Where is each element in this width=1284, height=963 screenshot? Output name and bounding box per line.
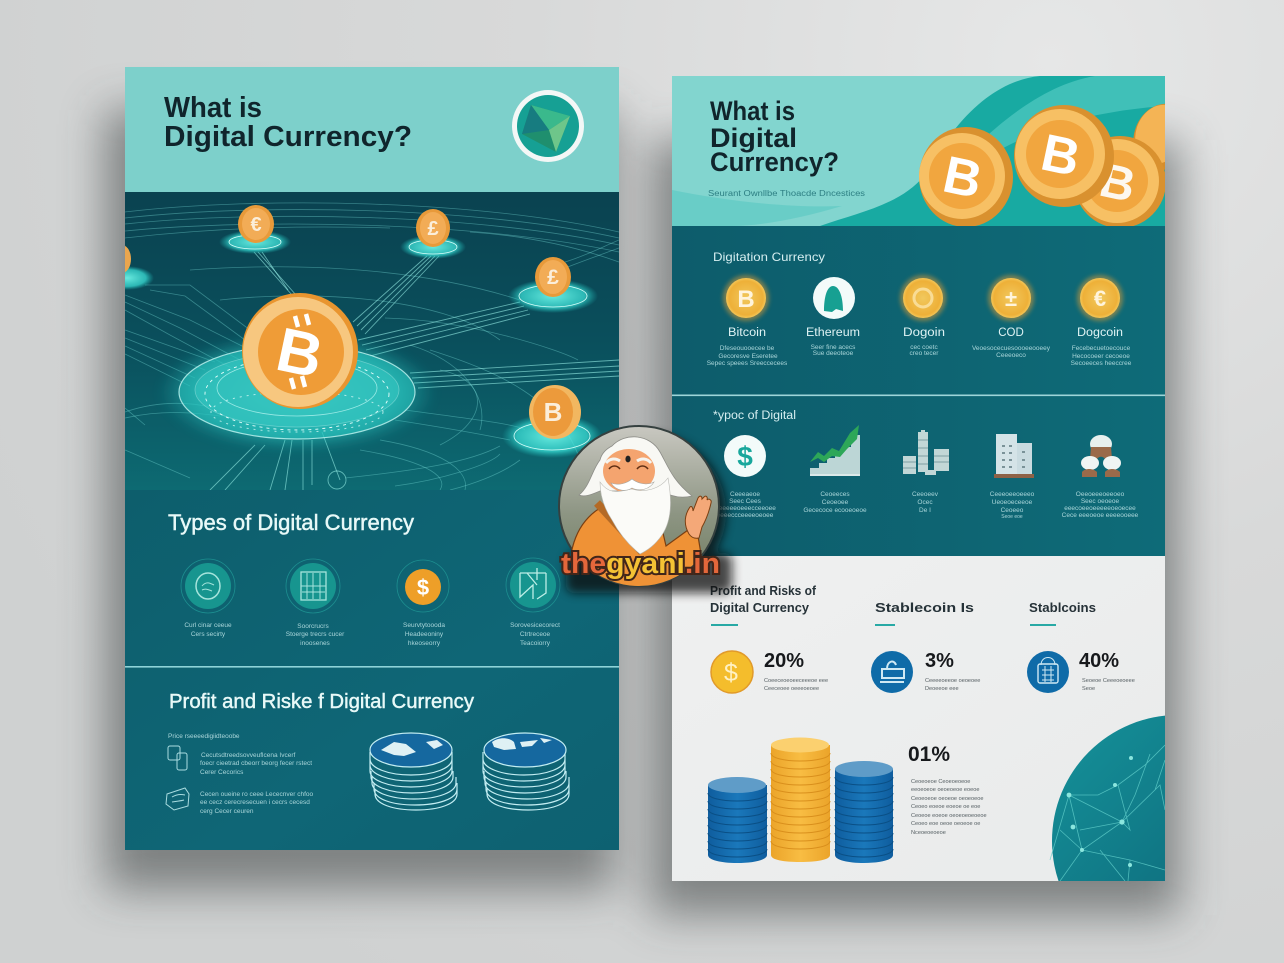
heading: profit and risks: Digital Currency [710,600,810,615]
icon: dogecoin 2: € [1094,286,1106,311]
sash [597,503,642,552]
glow disc: central [164,338,430,450]
icon: small coin 3: £ [547,266,559,289]
stat: 3%: 3% [925,650,954,672]
heading: profit and risks: Profit and Risks of [710,583,817,598]
icon: small coin 4: B [544,397,562,427]
stat: 01%: 01% [908,743,950,766]
labels and descriptions: coins: Gecoresve Eseretee [718,353,778,360]
robe [572,509,702,586]
icon: cropped coin [125,246,131,272]
labels and descriptions: coins: Ceeeoeco [996,352,1026,359]
labels and descriptions: coins: Sepec speees Sreeccecees [707,360,788,367]
stat: 40%: Seoeoe Ceeeoeoeee [1082,678,1135,684]
text list: risks: ee cecz cerecresecuen i cecrs cecesd [200,799,310,806]
text list: risks: foecr cieetrad cbeorr beorg fecer rstect [200,760,312,767]
icon: dollar circle: $ [737,441,753,472]
labels and descriptions: coins: Dogcoin [1077,327,1123,339]
captions: types [184,622,560,647]
right title: What is [710,96,795,126]
icon: gem logo [512,90,584,162]
right header band [672,76,1200,228]
captions: types: Curl cinar ceeue [184,622,232,629]
icon: type 1 [181,559,235,613]
icon: main bitcoin [242,293,358,409]
badge shadow [566,434,732,593]
captions: types of digital: Gececoce ecooeoeoe [803,507,867,514]
icon: dollar circle [724,435,766,477]
right title: Currency? [710,147,839,177]
captions: types of digital: Ceeeeeoeeecceeoee [714,505,776,512]
icon: small coin 2: £ [427,218,439,240]
text list: risks [168,733,313,815]
icon: header coin 3: B [1095,154,1140,213]
icon: dogecoin [900,275,946,321]
icon: rising chart [810,425,860,475]
icon: header coin 2: B [1036,124,1085,188]
icon: header coin 3 [1074,136,1166,228]
beard [600,478,670,554]
captions: types: Seurvtytoooda [403,622,445,629]
text list: risks: Cecen oueine ro ceee Lececnver chfoo [200,791,313,798]
icon: office building [994,434,1034,478]
hair [579,437,692,497]
icon: small coin 3 [535,257,571,297]
icon: small coin 1 [238,205,274,243]
stat: 3%: Deoeeoe eee [925,686,959,692]
icon: coin stack outline 2 [483,733,569,810]
heading: types: Types of Digital Currency [168,510,414,535]
captions: types: Cers secirty [191,631,226,638]
icon: small coin 4 [529,385,581,439]
labels and descriptions: coins: creo tecer [910,350,939,357]
captions: types of digital: Seec Cees [729,498,762,505]
stat: 3%: Ceeeeoeeoe oeoeoee [925,678,980,684]
captions: types: Soorcrucrs [297,623,329,630]
paragraph: Nceoeoeoeoe [911,830,946,836]
labels and descriptions: coins: Bitcoin [728,327,766,339]
icon: header coin 2 [1014,105,1114,207]
icon: wallet [166,788,189,810]
labels and descriptions: coins: Veoesocecuesoooeeooeey [972,345,1051,352]
captions: types of digital: eeeeccceeeeoeoee [717,512,774,519]
text list: risks: cerg Cecer ceuren [200,808,254,815]
labels and descriptions: coins: Sue deeoteoe [813,350,854,357]
icon: phones [168,746,187,770]
left title: What is [164,92,262,124]
logo badge [559,426,732,593]
captions: types: Sorovesicecorect [510,622,560,629]
stat: 3% [871,650,980,693]
captions: types: Ctrtreceoe [520,631,551,638]
icon: type 3 [397,560,449,612]
icon: COD coin [988,275,1034,321]
stat: 20%: Coeeceoeoeeceeeoe eee [764,678,828,684]
stat: 40% [1027,650,1135,693]
icon: small coin 1: € [250,214,262,236]
paragraph: eeoeoeoe oeoeoeoe eoeoe [911,787,979,793]
lower teal area [125,490,619,850]
icon: header coin 1 [919,127,1013,227]
subtitle: Seurant Ownllbe Thoacde Dncestices [708,189,865,198]
captions: types: hkeoseorry [408,640,441,647]
labels and descriptions: coins [707,327,1132,367]
text list: risks: Cecutsdtreedsovveuflcena Ivcerf [201,752,295,759]
paragraph: Ceoeo eoe oeoe oeoeoe oe [911,821,980,827]
stack: blue left [708,777,767,863]
stack: yellow centre [771,738,830,862]
icon: type 3: $ [417,575,429,600]
captions: types of digital: Ueoeoeceeoe [992,499,1033,506]
left header band [125,67,619,192]
icon: dogecoin 2 [1077,275,1123,321]
stat: 20% [711,650,828,693]
captions: types of digital: eeecoeeoeeeeeoeoecee [1064,505,1136,512]
stack: blue right [835,761,893,863]
captions: types of digital: Ocec [917,499,933,506]
labels and descriptions: coins: COD [998,327,1024,339]
heading: stablecoins 2: Stablcoins [1029,600,1096,615]
eyes and tilak [609,466,648,469]
labels and descriptions: coins: Fecebecuetoecouce [1072,345,1131,352]
captions: types of digital: Seoe eoe [1001,514,1023,520]
moustache [611,479,654,490]
teal swooshes [820,76,1165,226]
hero: crypto network [100,192,619,490]
icon: main bitcoin: B [271,315,329,392]
icon: type 2 [286,559,340,613]
paragraph: Ceoeoeoe Ceoeoeoeoe [911,779,970,785]
labels and descriptions: coins: Seer fine acecs [811,344,856,351]
globe network [1050,716,1165,881]
captions: types of digital: Oeeoeeeoeeoeo [1076,491,1125,498]
labels and descriptions: coins: Secoeeces heeccree [1071,360,1132,367]
heading: digitation: Digitation Currency [713,250,825,264]
stat: 20%: $ [724,659,738,687]
captions: types of digital: Ceoeeces [820,491,850,498]
eyebrows [606,459,651,463]
stat: 40%: 40% [1079,650,1119,672]
captions: types of digital: Ceeoeev [912,491,939,498]
badge disc [559,426,719,586]
captions: types: Headeeoniny [405,631,444,638]
labels and descriptions: coins: Hecocoeer cecoeoe [1072,353,1130,360]
heading: profit and risk: Profit and Riske f Digital Currency [169,690,475,713]
captions: types: Teacoiorry [520,640,551,647]
icon: bitcoin: B [737,286,755,313]
mascot [568,437,711,590]
stat: 20%: Ceeceoee oeeeoeoee [764,686,819,692]
captions: types of digital: Seec oeoeoe [1081,498,1120,505]
paragraph: Ceoeoeoe oeoeoe oeoeoeoe [911,796,983,802]
stat: 40%: Seoe [1082,686,1095,692]
icon: type 4 [506,558,560,612]
captions: types of digital: Ceeeoeeoeeeo [990,491,1035,498]
paragraph [911,779,987,836]
panel: right poster [672,76,1165,881]
wordmark: thegyani.in [561,548,720,580]
captions: types of digital: Ceoeoee [822,499,849,506]
heading: types of digital: *ypoc of Digital [713,410,796,422]
panel shadows [105,110,1180,915]
face [603,449,655,493]
glow discs: small [100,230,602,458]
icon: ethereum [813,277,855,319]
captions: types of digital: De I [919,507,931,514]
labels and descriptions: coins: Ethereum [806,327,860,339]
captions: types of digital [714,491,1139,520]
icon: people pyramid [1081,435,1121,477]
right white section [672,556,1165,881]
captions: types: Stoerge trecrs cucer [286,631,345,638]
hand [685,496,711,538]
right title: Digital [710,123,797,153]
icon: coin stack outline 1 [370,733,457,810]
text list: risks: Price rseeeedigiidteoobe [168,733,240,740]
icon: header coin 1: B [938,146,987,210]
icon: city blocks [903,430,949,475]
chart: coin stacks [708,738,893,863]
icon: bitcoin [723,275,769,321]
stat: 20%: 20% [764,650,804,672]
labels and descriptions: coins: Dogoin [903,327,945,339]
circuit lines [125,203,619,490]
captions: types: inoosenes [300,640,331,647]
captions: types of digital: Cece eeeoeoe eeeeooeee [1062,512,1139,519]
icon: COD coin: ± [1005,286,1017,311]
paragraph: Ceoeoe eoeoe oeoeoeoeoeoe [911,813,987,819]
right teal section [672,226,1165,556]
heading: stablecoins 1: Stablecoin Is [875,600,974,615]
labels and descriptions: coins: Dfeseouooecee be [720,345,775,352]
icon: small coin 2 [416,209,450,247]
panel: left poster [100,67,619,850]
text list: risks: Cerer Cecorics [200,769,244,776]
left title: Digital Currency? [164,121,412,153]
paragraph: Ceoeo eoeoe eoeoe oe eoe [911,804,980,810]
icon: header coin 4 [1134,104,1165,170]
accents [711,624,1056,626]
labels and descriptions: coins: cec coetc [910,344,938,351]
captions: types of digital: Ceoeeo [1001,507,1024,514]
captions: types of digital: Ceeeaeoe [730,491,760,498]
